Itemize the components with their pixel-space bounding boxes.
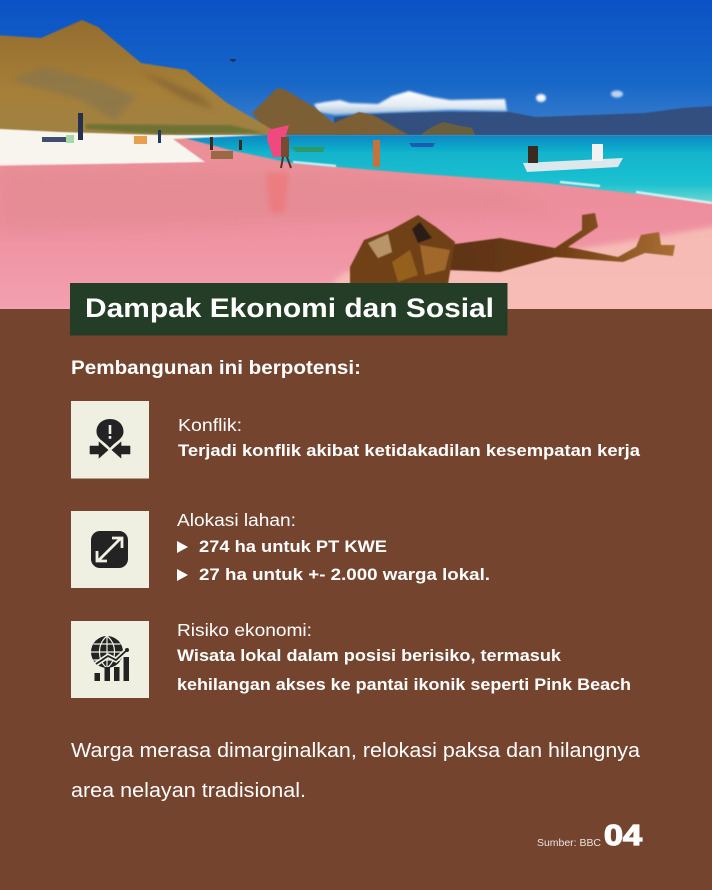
pink sand base bbox=[0, 135, 712, 310]
icon: expand arrows bbox=[71, 511, 149, 588]
turquoise sea bbox=[173, 135, 712, 205]
drone bbox=[230, 59, 236, 62]
title bbox=[70, 283, 508, 336]
heading: intro: Pembangunan ini berpotensi: bbox=[71, 357, 361, 379]
distant mountains bbox=[334, 105, 712, 136]
item: konflik bbox=[71, 401, 641, 478]
foam bbox=[293, 162, 712, 203]
text: risiko detail line 1: Wisata lokal dalam posisi berisiko, termasuk bbox=[177, 646, 562, 665]
item: risiko ekonomi bbox=[71, 620, 631, 698]
boats bbox=[291, 143, 623, 172]
text: risiko detail line 2: kehilangan akses ke pantai ikonik seperti Pink Beach bbox=[177, 675, 631, 694]
beach photo bbox=[0, 0, 712, 320]
hill rock shading bbox=[10, 67, 136, 120]
icon: globe chart bbox=[71, 621, 149, 698]
driftwood bbox=[350, 213, 675, 284]
large brown hill bbox=[0, 20, 280, 136]
vegetation line bbox=[86, 124, 264, 134]
sky bbox=[0, 0, 712, 136]
icon: bullet triangle bbox=[177, 541, 188, 553]
icon: bullet triangle bbox=[177, 569, 188, 581]
band under the photo bbox=[0, 309, 712, 890]
icon: conflict bbox=[71, 401, 149, 478]
clouds bbox=[314, 90, 623, 115]
text block: conclusion: area nelayan tradisional. bbox=[71, 780, 306, 802]
wet sand reflection bbox=[0, 170, 560, 235]
title: Dampak Ekonomi dan Sosial bbox=[85, 293, 494, 323]
text block: conclusion: Warga merasa dimarginalkan, relokasi paksa dan hilangnya bbox=[71, 740, 641, 762]
item: alokasi lahan bbox=[71, 510, 490, 588]
text: risiko label: Risiko ekonomi: bbox=[177, 620, 312, 640]
text: allocation PT KWE: 274 ha untuk PT KWE bbox=[199, 537, 387, 556]
middle hills bbox=[252, 88, 409, 136]
text: alokasi label: Alokasi lahan: bbox=[177, 510, 296, 530]
light sand corner bbox=[320, 224, 712, 320]
small island bbox=[420, 122, 475, 135]
text: konflik label: Konflik: bbox=[178, 415, 242, 435]
text: konflik detail: Terjadi konflik akibat ketidakadilan kesempatan kerja bbox=[178, 441, 641, 460]
text: allocation warga: 27 ha untuk +- 2.000 warga lokal. bbox=[199, 565, 490, 584]
text block: conclusion bbox=[71, 740, 641, 802]
white sand bbox=[0, 128, 264, 166]
flamingo float and beach people bbox=[42, 113, 380, 168]
source: Sumber: BBC bbox=[537, 837, 601, 849]
page number: 04 bbox=[604, 820, 642, 852]
